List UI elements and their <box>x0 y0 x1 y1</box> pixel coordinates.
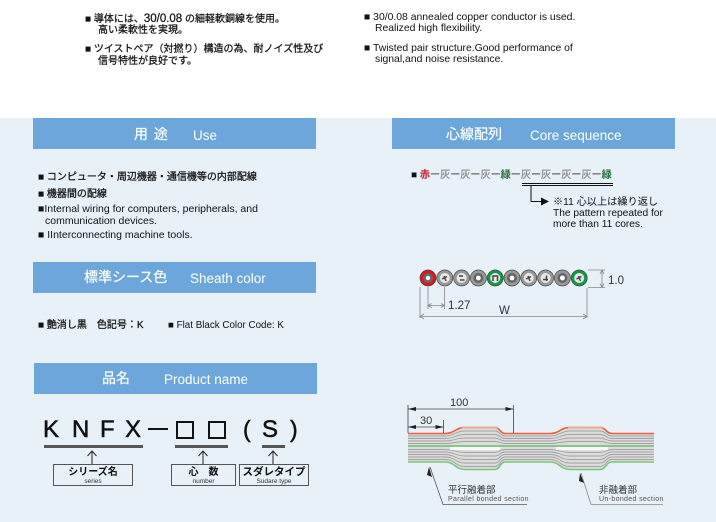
text block: features English: Realized high flexibility. <box>375 23 482 34</box>
text block: features Japanese: ■ ツイストペア（対撚り）構造の為、耐ノイズ性及び <box>85 44 323 55</box>
text block: features Japanese: ■ 導体には、30/0.08 の細軽軟銅線を使用。 <box>85 13 285 25</box>
text block: features English: ■ 30/0.08 annealed copper conductor is used. <box>364 12 575 23</box>
label: number: number <box>192 478 215 485</box>
callout: un-bonded section: Un-bonded section <box>599 496 664 503</box>
text block: features English: ■ Twisted pair structure.Good performance of <box>364 43 573 54</box>
text block: use list: communication devices. <box>45 215 157 227</box>
callout: parallel bonded section <box>427 467 529 504</box>
core: gray <box>504 270 520 286</box>
dimension lines: cross-section <box>420 270 605 319</box>
text block: sheath color <box>38 319 284 331</box>
product name code diagram: ( <box>243 416 251 442</box>
text block: features Japanese: 高い柔軟性を実現。 <box>98 25 188 36</box>
callout: un-bonded section <box>579 473 664 504</box>
product name code diagram: S <box>262 416 278 443</box>
core: gray <box>454 270 470 286</box>
text block: use list: ■Internal wiring for computers, peripherals, and <box>38 203 258 215</box>
core: green <box>487 270 503 286</box>
heading: core sequence: 心線配列 <box>446 126 502 142</box>
heading: use <box>33 118 316 149</box>
callout: parallel bonded section: 平行融着部 <box>448 484 496 496</box>
core: gray <box>437 270 453 286</box>
heading: use: Use <box>193 128 217 143</box>
core: red <box>420 270 436 286</box>
note: repeated pattern <box>553 196 663 230</box>
dimension labels <box>448 275 624 317</box>
product name code diagram: K <box>43 416 59 443</box>
product name code diagram: N <box>72 416 89 443</box>
heading: product name <box>34 363 317 394</box>
label: series <box>53 464 133 486</box>
heading: product name: 品名 <box>102 370 130 386</box>
note: repeated pattern: The pattern repeated for <box>553 208 663 219</box>
core: green <box>571 270 587 286</box>
product name code diagram: X <box>125 416 141 443</box>
label: sudare type: スダレタイプ <box>242 466 306 478</box>
note: repeated pattern: more than 11 cores. <box>553 219 643 230</box>
text block: features Japanese <box>85 12 324 67</box>
heading: core sequence: Core sequence <box>530 128 622 143</box>
core: gray <box>521 270 537 286</box>
heading: core sequence <box>392 118 675 149</box>
label: sudare type <box>239 464 309 486</box>
heading: sheath color: Sheath color <box>190 271 266 286</box>
dimension labels: W <box>499 305 510 317</box>
dimension: 100 and 30: 30 <box>420 415 432 427</box>
text block: sheath color: ■ 艶消し黒 色記号：K <box>38 320 144 331</box>
note: repeated pattern: ※11 心以上は繰り返し <box>553 197 658 208</box>
core: gray <box>470 270 486 286</box>
text block: features English <box>364 12 575 65</box>
text block: use list: ■ コンピュータ・周辺機器・通信機等の内部配線 <box>38 172 257 183</box>
text block: sheath color: ■ Flat Black Color Code: K <box>168 320 284 331</box>
text block: use list: ■ 機器間の配線 <box>38 189 107 200</box>
text block: use list <box>38 171 258 241</box>
label: number: 心 数 <box>188 467 218 478</box>
product name code diagram: F <box>100 416 115 443</box>
core sequence text: ■ 赤ー灰ー灰ー灰ー緑ー灰ー灰ー灰ー灰ー緑 <box>411 170 612 181</box>
heading: sheath color: 標準シース色 <box>84 269 167 285</box>
label: series: シリーズ名 <box>68 467 118 478</box>
core: gray <box>538 270 554 286</box>
dimension: 100 and 30: 100 <box>450 397 468 409</box>
callout: parallel bonded section: Parallel bonded section <box>448 496 529 503</box>
text block: features English: signal,and noise resistance. <box>375 54 503 65</box>
heading: product name: Product name <box>164 372 248 387</box>
product name code diagram: ) <box>290 416 298 442</box>
text block: features Japanese: 信号特性が良好です。 <box>98 56 197 67</box>
heading: sheath color <box>33 262 316 293</box>
label: sudare type: Sudare type <box>256 478 292 485</box>
callout: un-bonded section: 非融着部 <box>599 484 638 496</box>
text block: use list: ■ IInterconnecting machine tools. <box>38 229 193 241</box>
label: number <box>171 464 236 486</box>
dimension: 100 and 30 <box>408 397 514 433</box>
core: gray <box>554 270 570 286</box>
label: series: series <box>84 478 102 485</box>
heading: use: 用 途 <box>134 126 169 142</box>
dimension labels: 1.0 <box>608 275 624 287</box>
product name code diagram <box>43 416 309 486</box>
dimension labels: 1.27 <box>448 300 470 312</box>
